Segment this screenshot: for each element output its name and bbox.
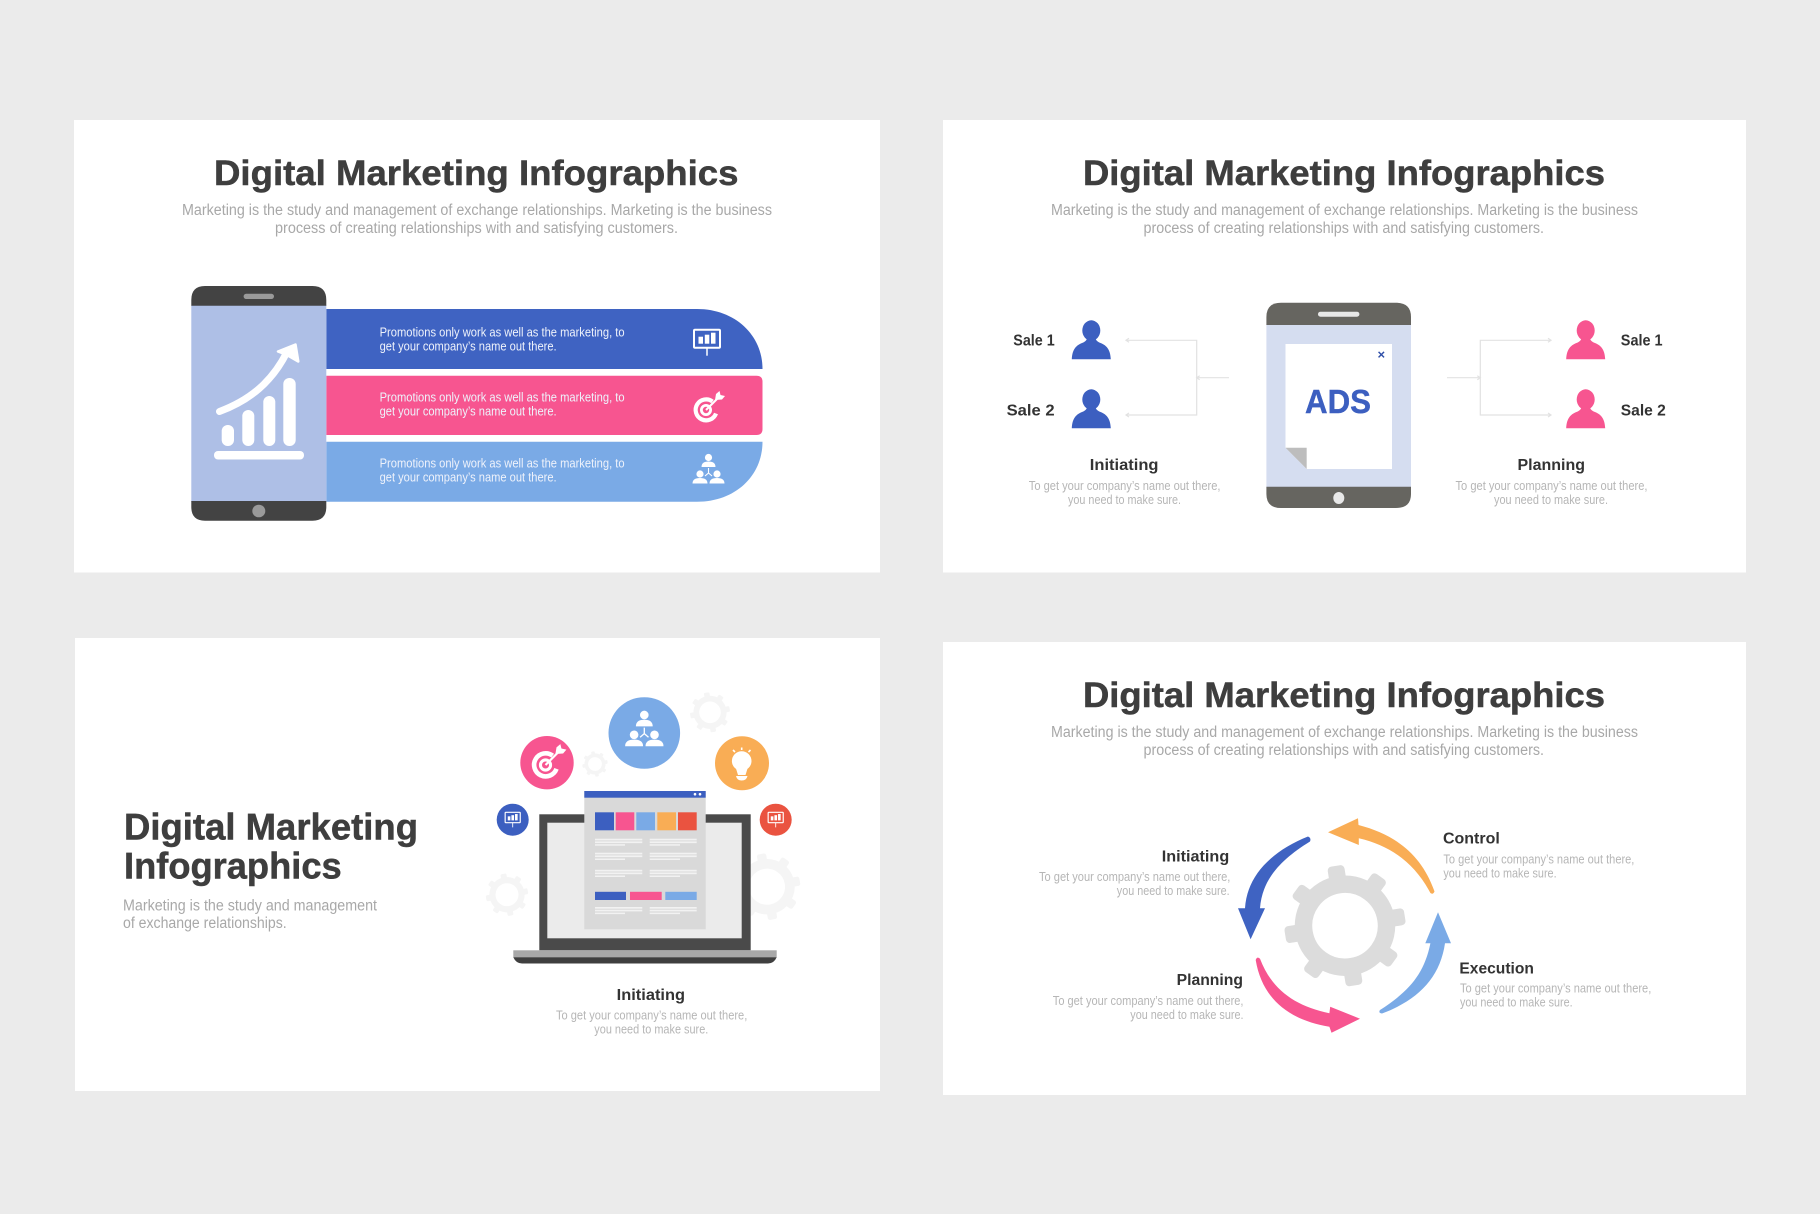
panel background [75, 638, 880, 1091]
document window [584, 791, 706, 929]
text block: initiating: To get your company’s name out there, [1029, 479, 1220, 493]
title: Digital Marketing Infographics [1083, 154, 1605, 193]
phone with ADS page: ADS [1305, 383, 1371, 420]
text block: initiating [556, 987, 747, 1036]
text block: planning: you need to make sure. [1130, 1008, 1244, 1022]
label: sale 1 right: Sale 1 [1621, 332, 1663, 349]
text block: initiating [1039, 849, 1230, 898]
bar: pink promotion: Promotions only work as well as the marketing, to [380, 390, 625, 404]
decorative gears [482, 689, 806, 925]
text block: execution [1459, 960, 1651, 1010]
panel: ads phone with sales people [943, 120, 1746, 572]
label: sale 1 left: Sale 1 [1013, 332, 1055, 349]
title: Digital Marketing [124, 806, 418, 847]
text block: initiating [1029, 457, 1220, 507]
title: Digital Marketing Infographics [1083, 676, 1605, 715]
icon circle: target [520, 736, 574, 789]
title [124, 806, 418, 887]
subtitle: Marketing is the study and management of exchange relationships. Marketing is the business [182, 202, 772, 219]
panel background [74, 120, 880, 572]
icon circle: team [608, 697, 680, 769]
subtitle: process of creating relationships with and satisfying customers. [275, 220, 678, 237]
text block: planning [1456, 457, 1648, 507]
bar: blue promotion: get your company’s name out there. [380, 338, 557, 354]
text block: execution: To get your company’s name out there, [1460, 982, 1651, 996]
bar: pink promotion: get your company’s name out there. [380, 404, 557, 418]
subtitle: Marketing is the study and management of exchange relationships. Marketing is the business [1051, 724, 1638, 741]
panel: cycle arrows around gear [943, 642, 1746, 1095]
label: sale 2 right: Sale 2 [1621, 402, 1666, 419]
label: sale 2 left: Sale 2 [1007, 402, 1055, 419]
panel: laptop with floating icons [75, 638, 880, 1091]
icon circle: blue presentation [497, 804, 529, 836]
text block: initiating: you need to make sure. [594, 1022, 708, 1036]
text block: planning: To get your company’s name out there, [1456, 479, 1648, 493]
text block: execution: Execution [1459, 960, 1534, 977]
bar: light blue promotion: get your company’s name out there. [380, 470, 557, 484]
icon circle: red presentation [760, 804, 792, 836]
subtitle: Marketing is the study and management [123, 898, 378, 915]
subtitle: Marketing is the study and management of exchange relationships. Marketing is the business [1051, 202, 1638, 219]
arrow: orange [1328, 818, 1434, 894]
arrow: light blue [1379, 912, 1451, 1014]
text block: control [1443, 830, 1634, 880]
bar: light blue promotion: Promotions only work as well as the marketing, to [380, 456, 625, 470]
text block: planning: you need to make sure. [1494, 493, 1608, 507]
text block: initiating: To get your company’s name out there, [1039, 870, 1230, 884]
arrow: blue [1238, 836, 1310, 939]
icon: growth chart [214, 344, 304, 460]
text block: execution: you need to make sure. [1460, 996, 1573, 1010]
bar: blue promotion [326, 309, 762, 369]
connector: left bracket [1126, 338, 1229, 417]
subtitle [1051, 202, 1638, 237]
phone [191, 286, 326, 521]
title: Digital Marketing Infographics [214, 154, 738, 193]
text block: initiating: you need to make sure. [1068, 493, 1181, 507]
phone with ADS page: × [1378, 347, 1386, 362]
person: sale 1 blue [1072, 320, 1111, 359]
text block: planning: Planning [1518, 457, 1585, 474]
text block: planning: Planning [1177, 972, 1243, 989]
text block: planning [1053, 972, 1244, 1022]
text block: control: you need to make sure. [1443, 866, 1557, 880]
panel background [943, 120, 1746, 572]
bar: light blue promotion [326, 442, 762, 502]
subtitle: process of creating relationships with and satisfying customers. [1144, 220, 1544, 237]
text block: initiating: you need to make sure. [1117, 884, 1230, 898]
icon: target [696, 391, 725, 420]
icon: presentation board [694, 330, 720, 356]
arrow: pink [1256, 958, 1360, 1033]
title: Infographics [124, 846, 342, 887]
icon: team [692, 454, 724, 484]
person: sale 2 pink [1566, 389, 1605, 428]
subtitle: process of creating relationships with and satisfying customers. [1144, 742, 1544, 759]
panel background [943, 642, 1746, 1095]
subtitle [123, 898, 378, 932]
laptop [513, 814, 777, 964]
bar: blue promotion: Promotions only work as well as the marketing, to [380, 324, 625, 340]
text block: initiating: Initiating [1090, 457, 1158, 474]
text block: control: To get your company’s name out there, [1443, 852, 1634, 866]
text block: initiating: To get your company’s name out there, [556, 1008, 747, 1022]
icon: central gear [1276, 856, 1414, 995]
subtitle [1051, 724, 1638, 759]
text block: initiating: Initiating [1162, 849, 1229, 866]
panel: phone with three marketing bars [74, 120, 880, 572]
bar: pink promotion [326, 376, 762, 435]
connector: right bracket [1447, 338, 1551, 417]
phone with ADS page [1266, 303, 1411, 508]
subtitle: of exchange relationships. [123, 915, 287, 932]
subtitle [182, 202, 772, 237]
icon circle: light bulb [715, 736, 769, 790]
text block: planning: To get your company’s name out there, [1053, 994, 1244, 1008]
text block: initiating: Initiating [617, 987, 685, 1004]
person: sale 2 blue [1072, 389, 1111, 428]
person: sale 1 pink [1566, 320, 1605, 359]
text block: control: Control [1443, 830, 1500, 847]
